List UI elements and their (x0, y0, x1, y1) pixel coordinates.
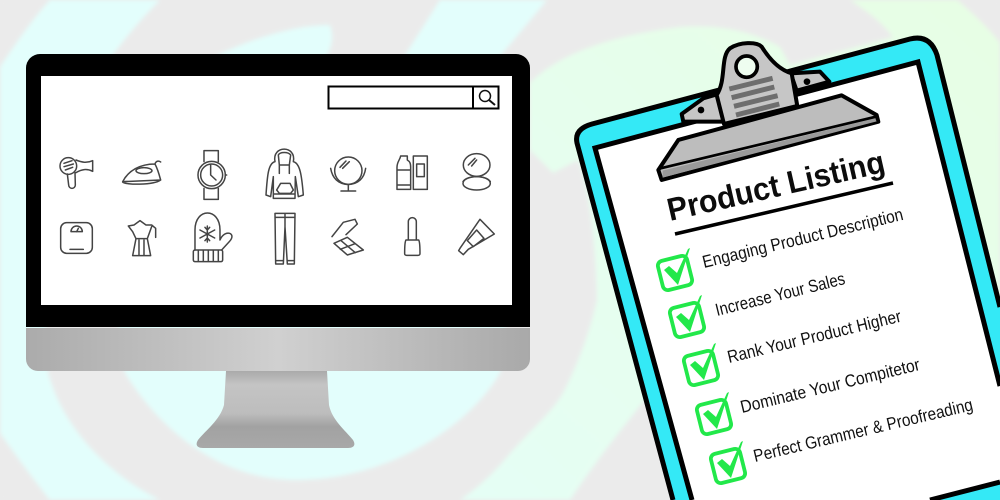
clip right wing (791, 72, 829, 91)
icon: magnifier (480, 90, 495, 105)
monitor stand (197, 371, 354, 448)
icon: palette (332, 219, 363, 255)
item 4: Dominate Your Compitetor (738, 354, 922, 417)
search box (328, 86, 498, 109)
monitor screen (41, 76, 512, 305)
icon row right (266, 149, 494, 264)
icon: jeans (275, 213, 295, 264)
clipboard (577, 38, 1000, 500)
monitor (26, 54, 530, 448)
icon: bottles (397, 156, 427, 189)
clip clamp (658, 95, 878, 180)
icon: iron (123, 161, 161, 184)
checklist (657, 204, 975, 484)
icon: watch (198, 151, 227, 199)
icon: hair dryer (60, 158, 93, 188)
clip centre (717, 43, 797, 124)
icon: mitten (193, 213, 232, 262)
item 4 (696, 354, 922, 435)
icon: hoodie (266, 149, 303, 198)
item 2 (669, 268, 847, 338)
item 1 (657, 204, 905, 291)
heading: Product Listing: Product Listing (664, 144, 888, 228)
clipboard clip (658, 43, 878, 180)
monitor bezel (26, 54, 530, 327)
item 5 (710, 394, 975, 484)
icon: mirror (331, 157, 366, 191)
item 5: Perfect Grammer & Proofreading (751, 394, 975, 466)
icon: tube (459, 219, 494, 255)
icon: scale (61, 223, 92, 253)
icon: compact (463, 154, 490, 190)
monitor chin (26, 328, 530, 371)
icon row 1 left (60, 151, 232, 262)
clipboard paper (595, 62, 1000, 500)
item 2: Increase Your Sales (713, 268, 847, 320)
heading underline (675, 183, 893, 234)
clipboard board (577, 38, 1000, 500)
clip ridges (729, 78, 779, 115)
item 3 (683, 306, 903, 386)
clip left wing (682, 94, 725, 122)
item 3: Rank Your Product Higher (725, 306, 903, 367)
icon: moka pot (128, 221, 156, 256)
icon: nail polish (405, 218, 420, 255)
item 1: Engaging Product Description (700, 204, 905, 272)
